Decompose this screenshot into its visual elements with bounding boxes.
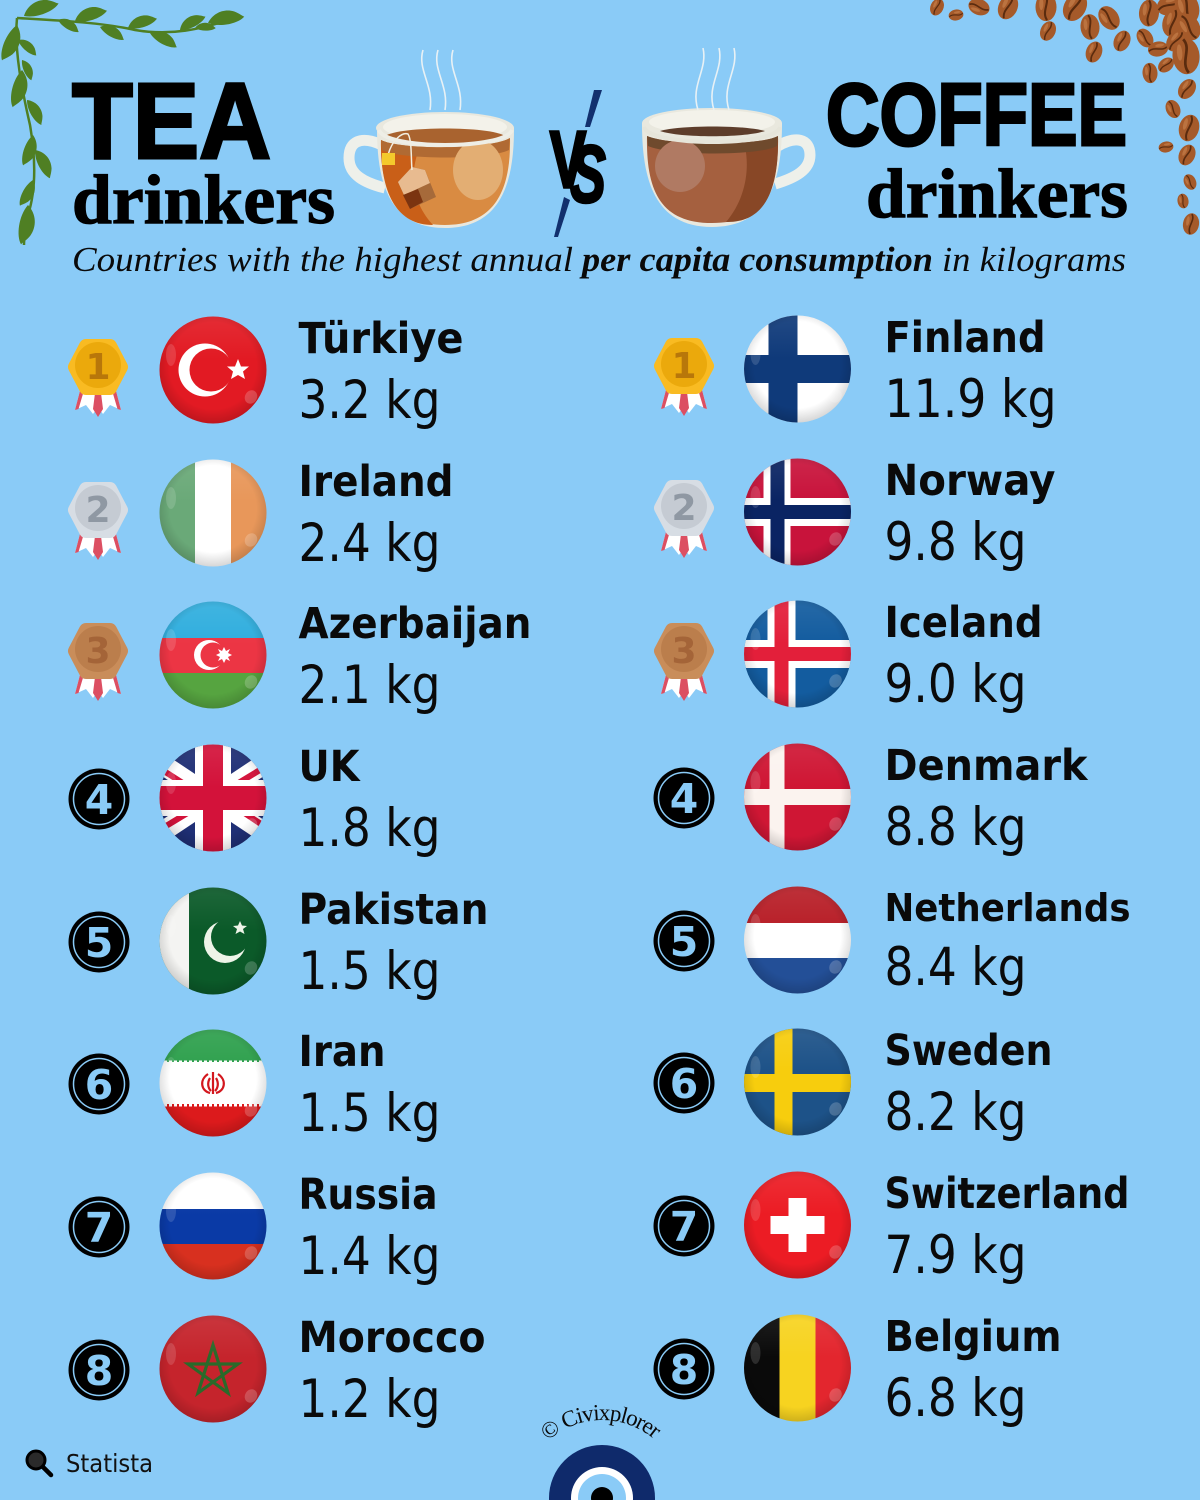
- row: Ireland tea rank 2: [75, 457, 454, 574]
- icon: rank 8 badge: [68, 1340, 130, 1400]
- icon: bronze medal: 3: [671, 631, 697, 672]
- row: Switzerland coffee rank 7: [654, 1169, 1130, 1286]
- title: TEA: TEA: [72, 60, 271, 181]
- value: 1.2 kg: [298, 1369, 440, 1430]
- name: Türkiye: [298, 314, 464, 364]
- VS label: S: [570, 129, 606, 220]
- row: Norway coffee rank 2: [661, 456, 1056, 573]
- name: Belgium: [884, 1312, 1062, 1362]
- icon: tea cup: [349, 112, 514, 228]
- icon: rank 6 badge: [68, 1054, 130, 1114]
- flag: Netherlands: [744, 886, 852, 994]
- flag: Pakistan: [159, 887, 267, 995]
- row: Denmark coffee rank 4: [654, 741, 1089, 858]
- value: 1.8 kg: [298, 798, 440, 859]
- flag: Russia: [159, 1172, 267, 1280]
- icon: silver medal: 2: [85, 490, 111, 531]
- icon: coffee steam: [696, 48, 735, 110]
- row: Türkiye tea rank 1: [75, 314, 464, 431]
- icon: bronze medal: 3: [85, 631, 111, 672]
- name: Morocco: [298, 1313, 486, 1363]
- icon: rank 7 badge: [654, 1196, 714, 1256]
- flag: Türkiye: [159, 316, 267, 424]
- name: Ireland: [298, 457, 454, 507]
- coffee beans decoration: [927, 0, 1200, 236]
- icon: rank 7 badge: [68, 1196, 130, 1258]
- icon: rank 4 badge: 4: [85, 776, 113, 824]
- credit: Civixplorer: [542, 1405, 660, 1438]
- row: Iran tea rank 6: [68, 1027, 440, 1144]
- icon: silver medal: 2: [671, 488, 697, 529]
- row: Iceland coffee rank 3: [661, 598, 1042, 715]
- row: Sweden coffee rank 6: [654, 1026, 1052, 1143]
- value: 2.1 kg: [298, 655, 440, 716]
- flag: Denmark: [744, 743, 852, 851]
- description line: [72, 240, 1126, 279]
- icon: magnifier: [27, 1451, 51, 1475]
- VS label: V: [550, 115, 586, 204]
- value: 1.5 kg: [298, 1083, 440, 1144]
- flag: Sweden: [744, 1028, 852, 1136]
- icon: rank 4 badge: [68, 768, 130, 830]
- value: 11.9 kg: [884, 369, 1056, 430]
- description line: per capita consumption: [579, 240, 933, 279]
- icon: rank 7 badge: 7: [85, 1204, 113, 1252]
- icon: gold medal: 1: [85, 347, 111, 388]
- value: 3.2 kg: [298, 370, 440, 431]
- row: UK tea rank 4: [68, 742, 440, 859]
- icon: rank 4 badge: [654, 768, 714, 828]
- name: Sweden: [884, 1026, 1052, 1076]
- vine decoration: [0, 0, 245, 246]
- flag: Iran: [159, 1029, 267, 1137]
- row: Pakistan tea rank 5: [68, 885, 488, 1002]
- description line: in kilograms: [942, 240, 1126, 279]
- icon: rank 8 badge: 8: [85, 1347, 113, 1395]
- name: UK: [298, 742, 361, 792]
- value: 8.2 kg: [884, 1082, 1026, 1143]
- icon: rank 5 badge: 5: [85, 919, 113, 967]
- flag: UK: [160, 744, 266, 852]
- name: Switzerland: [884, 1169, 1130, 1219]
- flag: Belgium: [744, 1314, 852, 1422]
- name: Iran: [298, 1027, 386, 1077]
- row: Azerbaijan tea rank 3: [75, 599, 532, 716]
- value: 1.4 kg: [298, 1226, 440, 1287]
- icon: rank 6 badge: 6: [670, 1060, 698, 1108]
- icon: rank 6 badge: 6: [85, 1061, 113, 1109]
- flag: Iceland: [744, 600, 852, 708]
- icon: rank 4 badge: 4: [670, 775, 698, 823]
- subtitle: coffee drinkers: drinkers: [866, 156, 1128, 233]
- row: Belgium coffee rank 8: [654, 1312, 1062, 1429]
- row: Finland coffee rank 1: [661, 313, 1056, 430]
- value: 1.5 kg: [298, 941, 440, 1002]
- value: 7.9 kg: [884, 1225, 1026, 1286]
- row: Russia tea rank 7: [68, 1170, 440, 1287]
- icon: gold medal: 1: [671, 346, 697, 387]
- icon: coffee cup: [642, 108, 810, 227]
- subtitle: tea drinkers: drinkers: [72, 162, 335, 239]
- flag: Azerbaijan: [159, 601, 267, 709]
- value: 6.8 kg: [884, 1368, 1026, 1429]
- description line: Countries with the highest annual: [72, 240, 573, 279]
- name: Iceland: [884, 598, 1042, 648]
- icon: silver medal: [661, 483, 707, 558]
- flag: Morocco: [159, 1315, 267, 1423]
- icon: rank 8 badge: [654, 1338, 714, 1400]
- row: Morocco tea rank 8: [68, 1313, 486, 1430]
- credit: Civixplorer: © Civixplorer: [542, 1405, 660, 1438]
- icon: silver medal: [75, 485, 121, 560]
- icon: bronze medal: [75, 626, 121, 701]
- value: 2.4 kg: [298, 513, 440, 574]
- icon: gold medal: [75, 342, 121, 417]
- flag: Switzerland: [744, 1171, 852, 1279]
- name: Azerbaijan: [298, 599, 532, 649]
- icon: evil eye logo: [549, 1445, 655, 1500]
- icon: tea steam: [422, 50, 461, 110]
- value: 8.4 kg: [884, 937, 1026, 998]
- source: Statista: Statista: [66, 1449, 153, 1478]
- name: Norway: [884, 456, 1056, 506]
- name: Denmark: [884, 741, 1089, 791]
- icon: rank 8 badge: 8: [670, 1346, 698, 1394]
- title: COFFEE: COFFEE: [826, 65, 1127, 164]
- icon: rank 5 badge: [68, 912, 130, 972]
- flag: Ireland: [159, 459, 267, 567]
- flag: Norway: [744, 458, 852, 566]
- value: 9.8 kg: [884, 512, 1026, 573]
- icon: rank 5 badge: 5: [670, 918, 698, 966]
- icon: rank 5 badge: [654, 910, 714, 972]
- icon: rank 7 badge: 7: [670, 1203, 698, 1251]
- flag: Finland: [744, 315, 852, 423]
- row: Netherlands coffee rank 5: [654, 886, 1130, 998]
- icon: bronze medal: [661, 626, 707, 701]
- icon: VS slash: [554, 90, 602, 237]
- icon: gold medal: [661, 341, 707, 416]
- name: Russia: [298, 1170, 438, 1220]
- value: 8.8 kg: [884, 797, 1026, 858]
- name: Finland: [884, 313, 1046, 363]
- icon: rank 6 badge: [654, 1052, 714, 1114]
- value: 9.0 kg: [884, 654, 1026, 715]
- name: Netherlands: [884, 886, 1130, 930]
- name: Pakistan: [298, 885, 488, 935]
